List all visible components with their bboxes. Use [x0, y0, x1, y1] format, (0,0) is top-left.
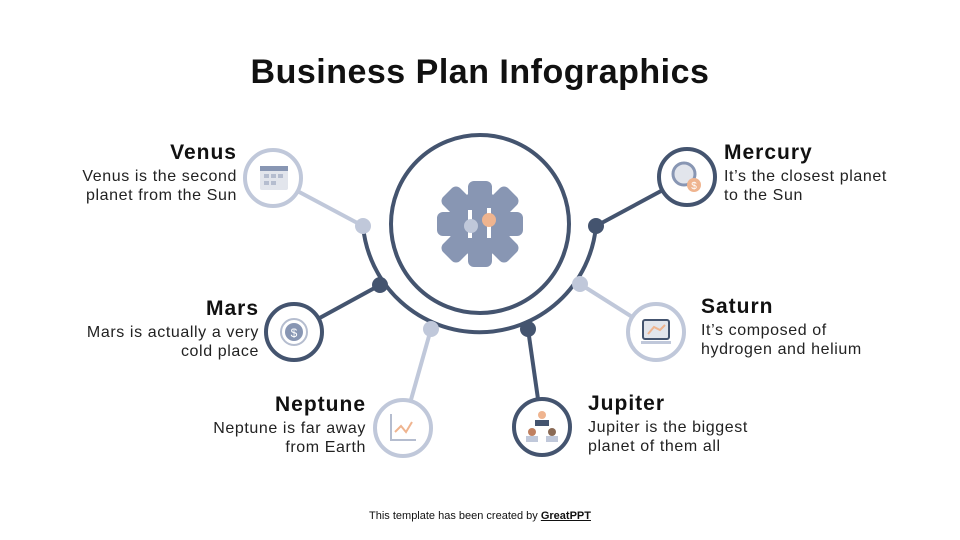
text: Neptune: from Earth	[285, 439, 366, 456]
icon: chart	[391, 414, 416, 440]
text: Venus: planet from the Sun	[86, 187, 237, 204]
text: Mercury: to the Sun	[724, 187, 803, 204]
icon: people	[526, 411, 558, 442]
central circle	[391, 135, 569, 313]
arc	[363, 226, 596, 332]
text: Mars: Mars	[206, 297, 259, 320]
text: Saturn: Saturn	[701, 295, 774, 318]
text: Mars: Mars is actually a very	[87, 324, 259, 341]
icon: monitor	[641, 320, 671, 344]
text: Venus	[82, 141, 237, 204]
text: Neptune: Neptune is far away	[213, 420, 366, 437]
text: Jupiter: planet of them all	[588, 438, 721, 455]
text: Mercury: Mercury	[724, 141, 813, 164]
text: Mars	[87, 297, 259, 360]
icon: clock with dollar: $	[691, 181, 697, 192]
text: Saturn	[701, 295, 862, 358]
text: Jupiter	[588, 392, 748, 455]
nodes	[355, 218, 604, 337]
icon: dollar cycle	[281, 319, 307, 345]
connector lines	[273, 177, 687, 428]
text: Neptune: Neptune	[275, 393, 366, 416]
text: Jupiter: Jupiter	[588, 392, 665, 415]
footer: This template has been created by GreatPPT	[369, 510, 591, 522]
text: Mercury	[724, 141, 887, 204]
title: Business Plan Infographics	[251, 53, 709, 91]
icon: dollar cycle: $	[291, 326, 298, 340]
icon circles	[245, 149, 715, 456]
icon: calendar	[260, 166, 288, 190]
text: Saturn: hydrogen and helium	[701, 341, 862, 358]
text: Jupiter: Jupiter is the biggest	[588, 419, 748, 436]
text: Mars: cold place	[181, 343, 259, 360]
text: Mercury: It’s the closest planet	[724, 168, 887, 185]
text: Venus: Venus	[170, 141, 237, 164]
text: Venus: Venus is the second	[82, 168, 237, 185]
text: Neptune	[213, 393, 366, 456]
icon: clock with dollar	[673, 163, 701, 192]
text: Saturn: It’s composed of	[701, 322, 827, 339]
icon: gear with sliders	[437, 181, 523, 267]
